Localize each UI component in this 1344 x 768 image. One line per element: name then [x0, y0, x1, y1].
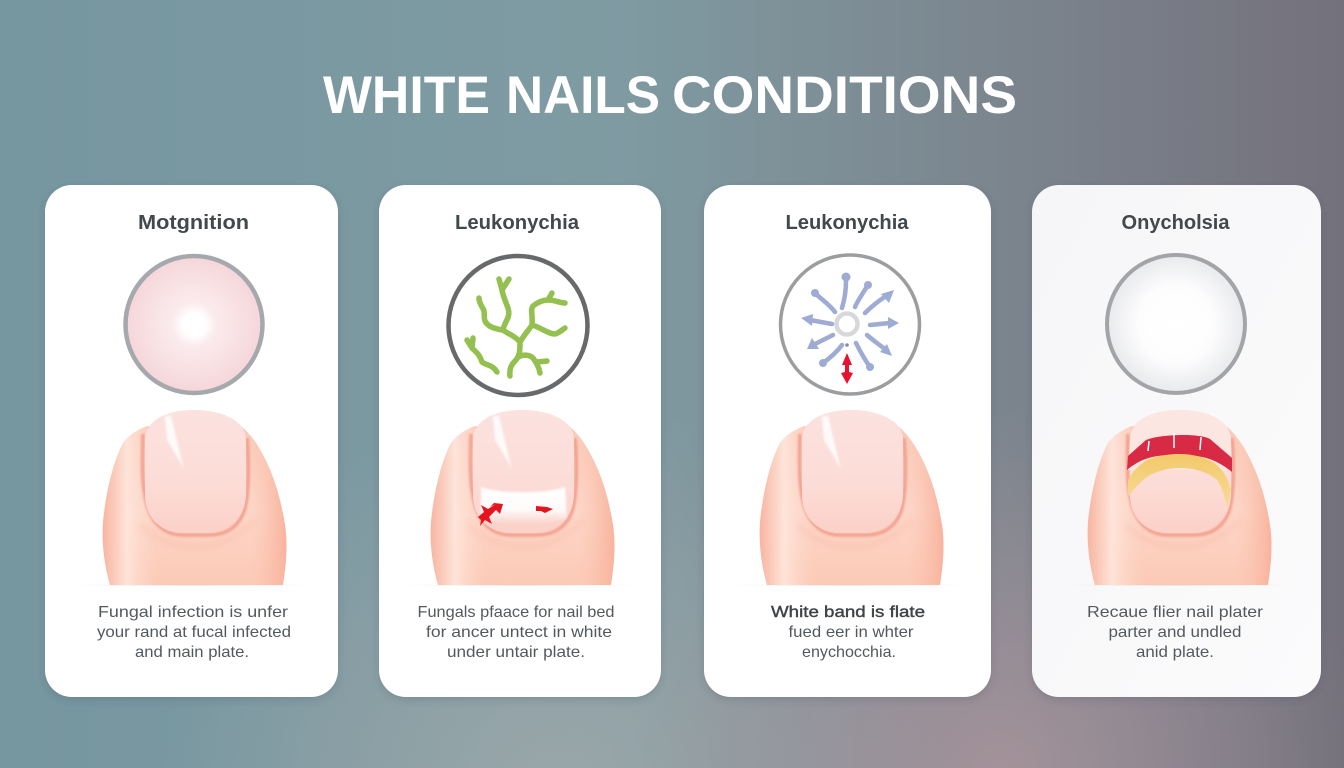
panel: Leukonychia fungal	[379, 185, 661, 697]
text block: description: anid plate.	[1136, 644, 1214, 661]
text block: description	[418, 604, 614, 661]
icon: pink circle with white centre	[126, 256, 262, 393]
title	[323, 66, 1017, 125]
text block: description	[97, 604, 291, 661]
illustration: nail with white band and red arrows	[431, 410, 614, 585]
red double arrow	[841, 353, 853, 384]
illustration: healthy nail	[760, 410, 943, 585]
illustration: healthy nail	[103, 410, 286, 585]
text block: description: your rand at fucal infected	[97, 624, 291, 641]
title: CONDITIONS	[672, 66, 1017, 125]
text block: description: Fungals pfaace for nail bed	[418, 604, 614, 621]
text block: description	[1087, 604, 1264, 661]
text block: description: Recaue flier nail plater	[1087, 604, 1264, 621]
heading: Leukonychia: Leukonychia	[786, 212, 909, 234]
heading: Motgnition: Motgnition	[138, 212, 249, 234]
text block: description: for ancer untect in white	[426, 624, 612, 641]
icon: pearly white circle	[1107, 255, 1245, 393]
text block: description: enychocchia.	[802, 644, 896, 661]
panel: Onycholsia	[1032, 185, 1321, 697]
white band	[481, 487, 567, 524]
icon: radiating arrows in circle	[780, 255, 920, 394]
text block: description: under untair plate.	[447, 644, 585, 661]
text block: description: Fungal infection is unfer	[98, 604, 289, 621]
yellow band	[1128, 454, 1231, 510]
panel: Leukonychia white band	[704, 185, 991, 697]
title: WHITE	[323, 66, 490, 125]
text block: description: fued eer in whter	[788, 624, 914, 641]
nail tip	[1128, 410, 1232, 470]
icon: green branching fungus in circle	[448, 256, 588, 395]
text block: description: White band is flate	[771, 604, 925, 621]
red arrow right	[536, 506, 553, 513]
red band	[1127, 435, 1232, 472]
white ticks	[1148, 433, 1201, 451]
text block: description: and main plate.	[135, 644, 249, 661]
red arrow left	[478, 503, 503, 526]
heading: Leukonychia: Leukonychia	[455, 212, 580, 234]
heading: Onycholsia: Onycholsia	[1122, 212, 1230, 234]
title: NAILS	[506, 66, 660, 125]
text block: description: parter and undled	[1108, 624, 1242, 641]
text block: description	[771, 604, 925, 661]
illustration: nail with lifted plate	[1088, 410, 1271, 585]
panel: Motgnition	[45, 185, 338, 697]
